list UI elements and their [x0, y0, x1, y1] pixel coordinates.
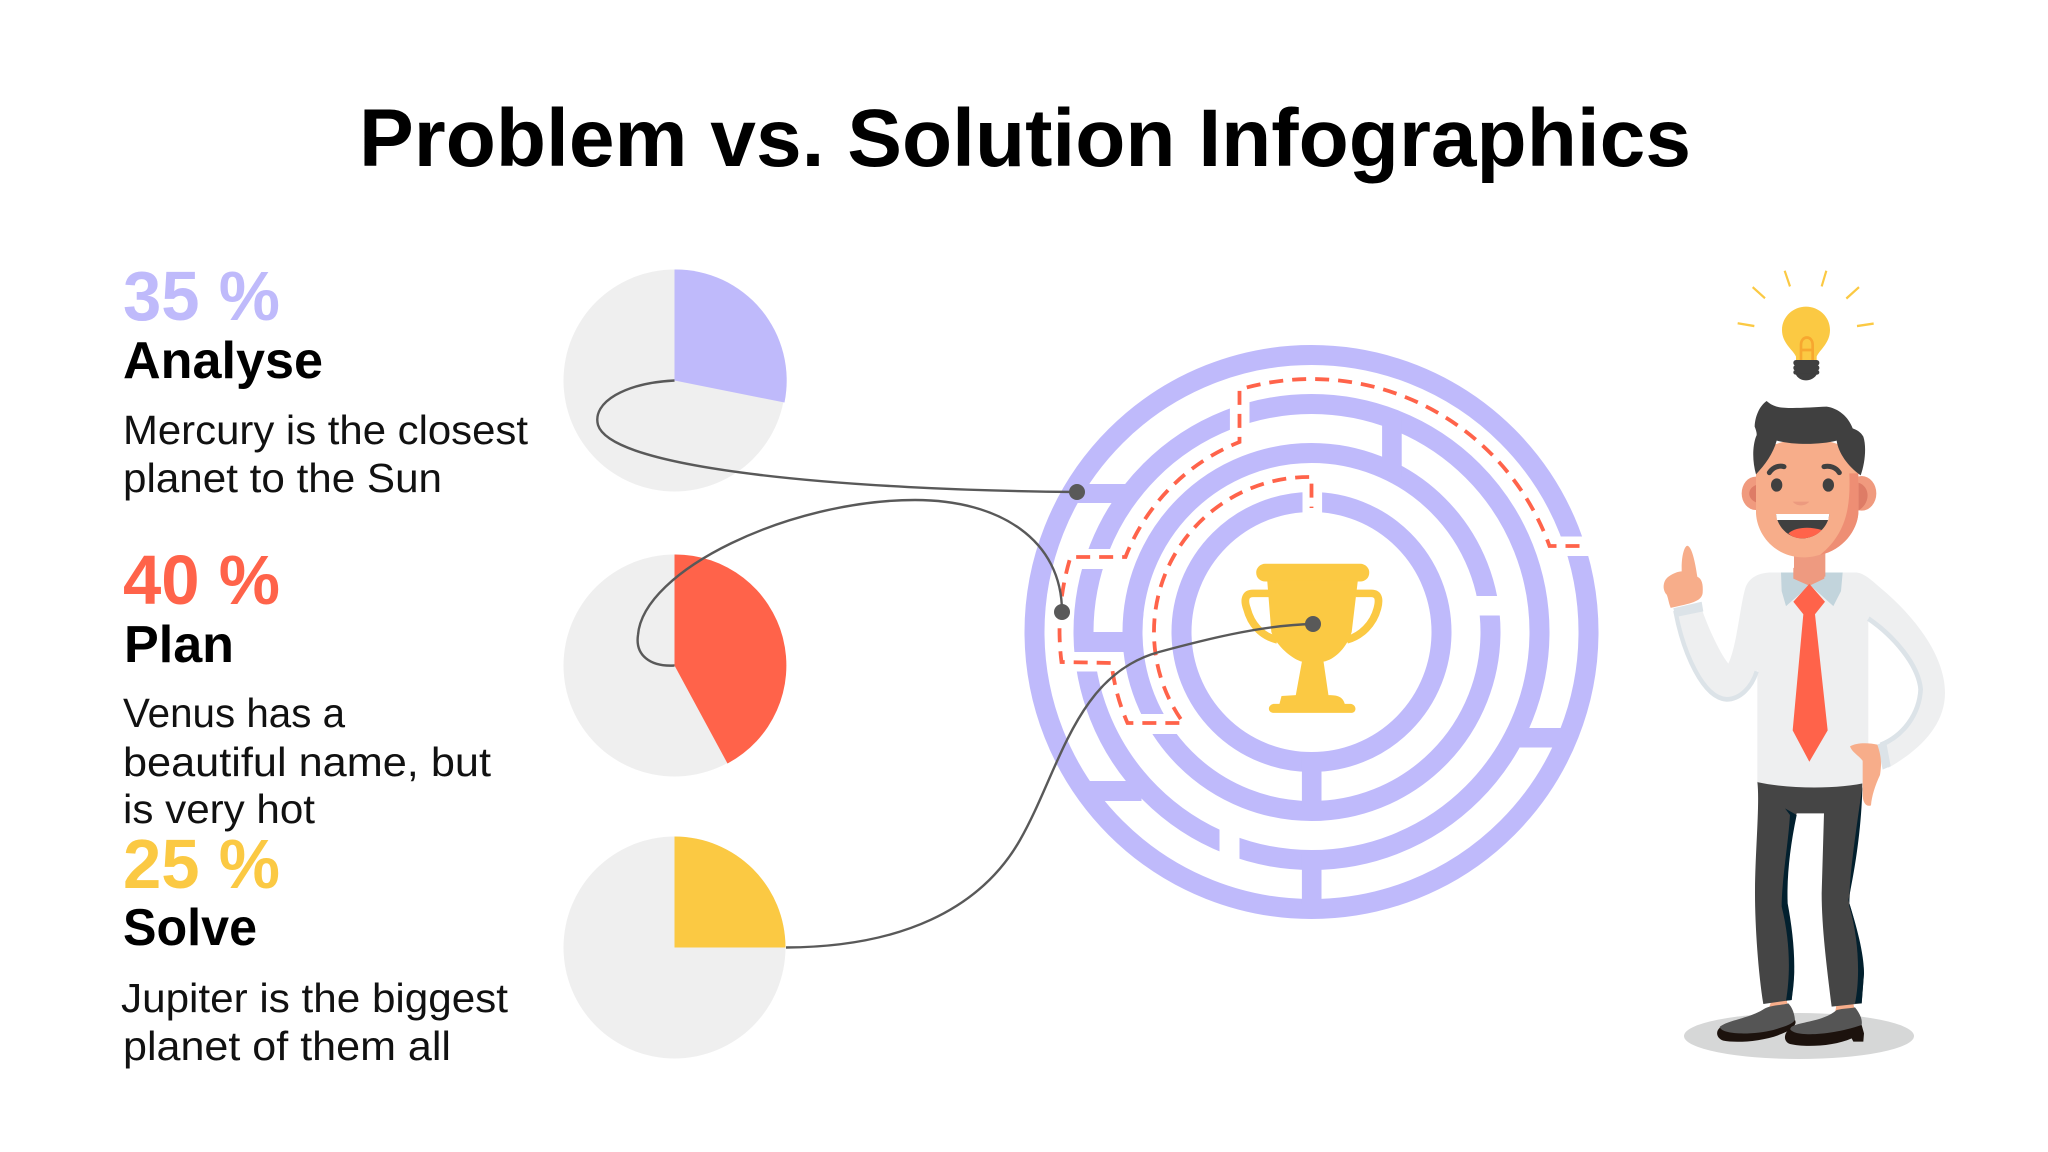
connector line: Plan to maze [638, 500, 1070, 666]
necktie [1793, 584, 1828, 762]
connector line: Solve to trophy [786, 616, 1321, 948]
text block: Plan: beautiful name, but [123, 739, 492, 785]
text block: Solve [121, 825, 509, 1069]
circular maze [1034, 355, 1612, 909]
title: Problem vs. Solution Infographics [359, 93, 1691, 184]
dashed solution path [1060, 379, 1580, 723]
pie chart: 25% [564, 836, 786, 1058]
hands [1664, 546, 1703, 608]
text block: Plan: is very hot [123, 786, 316, 832]
head [1742, 401, 1876, 577]
upper body [1664, 546, 1945, 806]
pie chart: 35% [564, 269, 787, 492]
connector line: Analyse to maze [597, 380, 1085, 500]
text block: Plan: Plan [124, 616, 234, 674]
text block: Analyse [123, 257, 529, 501]
legs and shoes [1717, 782, 1864, 1046]
pie chart: 40% [564, 554, 786, 776]
icon: trophy [1245, 564, 1379, 713]
illustration: businessman [1664, 401, 1945, 1059]
icon: light bulb [1738, 271, 1874, 380]
text block: Analyse: planet to the Sun [123, 455, 442, 501]
text block: Solve: Solve [123, 899, 257, 957]
ground shadow [1684, 1013, 1914, 1059]
text block: Plan [123, 541, 492, 832]
text block: Solve: 25 % [123, 825, 280, 903]
text block: Analyse: 35 % [123, 257, 280, 335]
text block: Solve: Jupiter is the biggest [121, 975, 509, 1021]
text block: Plan: Venus has a [123, 690, 345, 736]
text block: Analyse: Analyse [123, 332, 323, 390]
text block: Plan: 40 % [123, 541, 280, 619]
text block: Solve: planet of them all [123, 1023, 451, 1069]
text block: Analyse: Mercury is the closest [123, 407, 529, 453]
